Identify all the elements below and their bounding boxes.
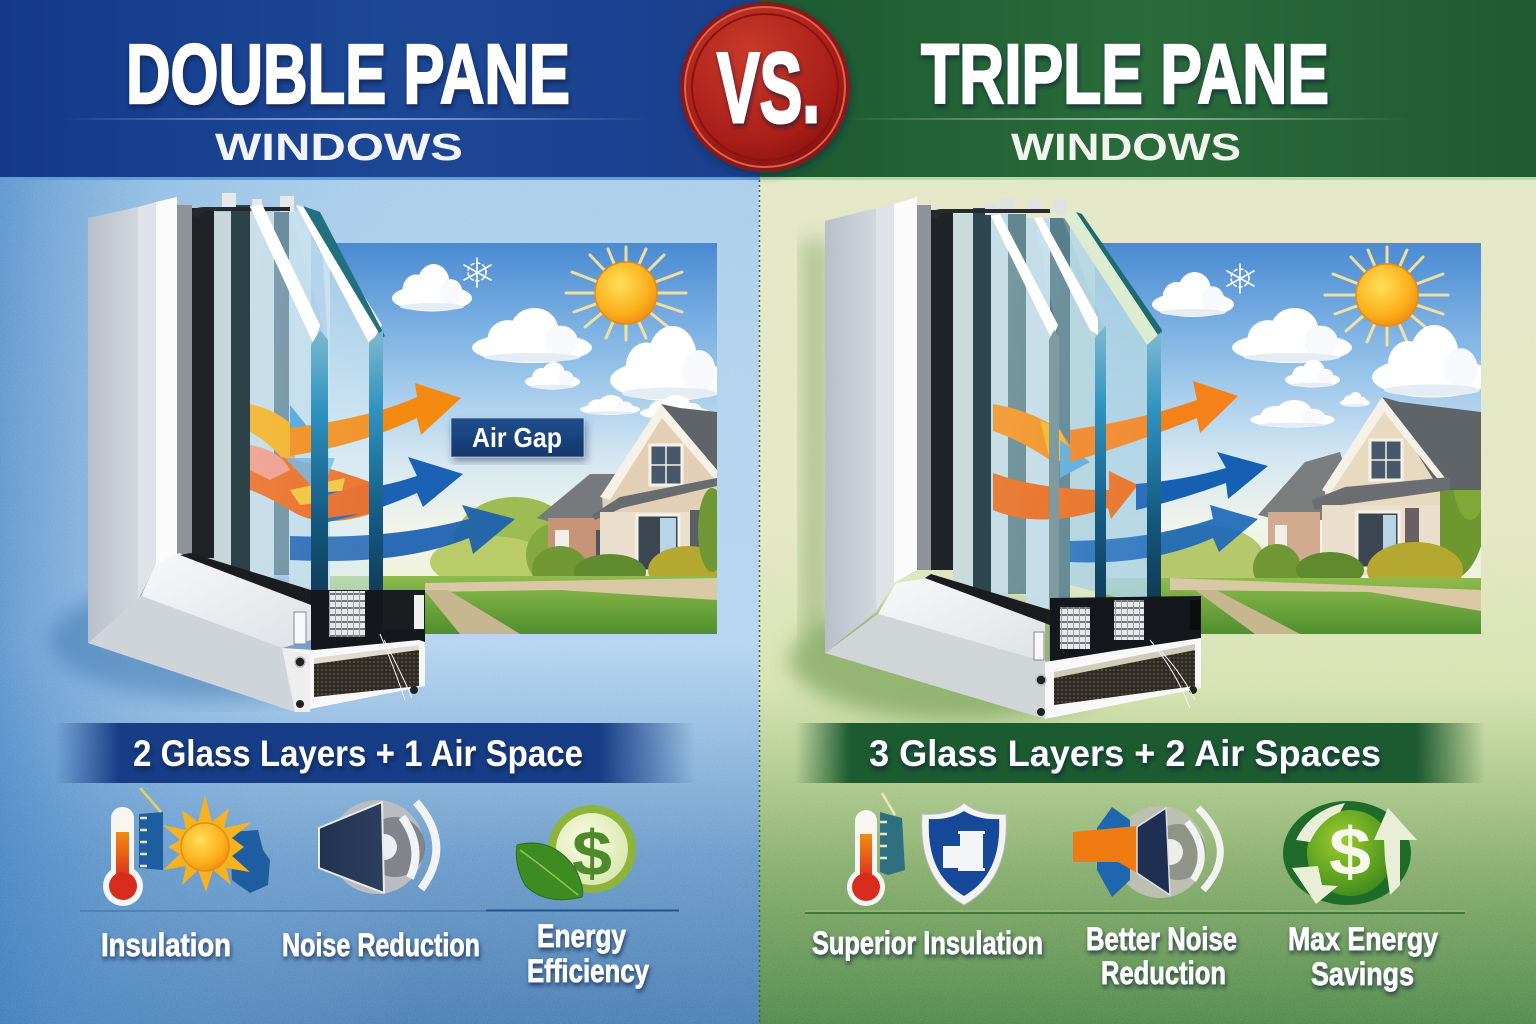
icon: noise reduction speaker [319,800,436,894]
sill [825,574,1201,719]
house [1258,397,1481,575]
orange low swoosh [328,482,370,518]
window: double pane cross-section [50,193,515,712]
icon: snowflake [464,258,491,287]
icon: energy efficiency coin and leaf [516,805,636,900]
frame [88,193,369,643]
label: max energy savings: Savings [1311,956,1414,992]
top seals [222,193,294,212]
label: energy efficiency: Efficiency [527,953,649,989]
scene: outdoor view, double pane [330,243,730,634]
arrow: blue, lower [290,505,515,561]
banner: 3 glass layers: 3 Glass Layers + 2 Air Spaces [869,733,1381,774]
arrow: orange, top [290,383,461,456]
icon: better noise reduction speaker [1073,806,1220,898]
hedges [532,488,717,576]
subtitle: windows: WINDOWS [215,127,463,169]
label: insulation: Insulation [101,927,231,963]
label: superior insulation: Superior Insulation [812,925,1043,961]
arrow: blue, middle [328,457,463,522]
label: better noise reduction: Reduction [1101,955,1226,991]
title: triple pane: TRIPLE PANE [921,27,1329,121]
panel: triple pane background [759,178,1536,1024]
trees [1145,490,1481,578]
sun [566,247,686,340]
trees and hedges [430,497,552,576]
clouds [392,264,730,420]
lawn [1095,578,1481,634]
icon: max energy savings coin with arrows: $ [1329,814,1371,890]
banner: 2 glass layers [55,723,695,783]
icon: insulation thermometer and sun [103,788,270,906]
badge: VS. [680,2,850,172]
frame [825,197,1147,653]
glass panes [250,204,385,648]
arrow: blue, lower [1070,505,1258,562]
label: energy efficiency [527,918,649,989]
label: noise reduction: Noise Reduction [282,927,480,963]
arrows: heat, behind glass [250,404,370,521]
lawn [330,576,717,634]
hedges [1253,542,1463,578]
banner: 3 glass layers [795,723,1485,783]
icon: max energy savings coin with arrows [1283,801,1417,905]
label: Air Gap: Air Gap [472,422,562,453]
arrow: blue, upper [1136,452,1268,510]
header: double pane [0,0,760,180]
label: better noise reduction [1086,921,1237,991]
top seals [985,198,1066,215]
icon: energy efficiency coin and leaf: $ [572,817,612,889]
label: better noise reduction: Better Noise [1086,921,1237,957]
panel: double pane background [0,178,759,1024]
scene: outdoor view, triple pane [1095,243,1492,634]
sun [1325,247,1448,345]
clouds [1152,272,1492,428]
label: Air Gap [451,418,584,457]
arrows: heat, behind glass [993,404,1138,520]
house [537,404,717,580]
icon: snowflake [1227,264,1254,293]
sill [88,553,425,712]
banner: 2 glass layers: 2 Glass Layers + 1 Air Space [133,733,583,774]
glass panes [991,212,1162,665]
header: triple pane [760,0,1536,180]
label: energy efficiency: Energy [537,918,626,954]
arrow: orange, top [1070,381,1238,462]
icon: superior insulation thermometer and shield [847,793,1006,906]
badge: VS.: VS. [717,32,820,143]
label: max energy savings [1288,921,1438,992]
label: max energy savings: Max Energy [1288,921,1438,957]
subtitle: windows: WINDOWS [1011,127,1241,169]
title: double pane: DOUBLE PANE [126,27,570,121]
window: triple pane cross-section [790,197,1268,720]
